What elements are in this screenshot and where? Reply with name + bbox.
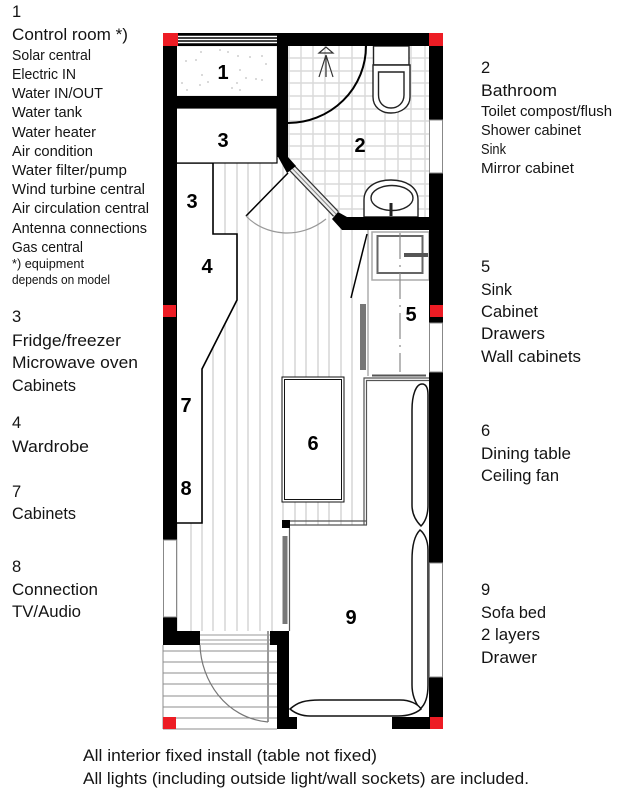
legend 9: sofa bed: 9 xyxy=(481,581,490,599)
icon: bathroom sink xyxy=(364,180,418,217)
legend 1: control room: Water heater xyxy=(12,125,96,141)
legend 4: wardrobe xyxy=(12,414,89,456)
legend 7: cabinets xyxy=(12,483,76,523)
footer note xyxy=(83,747,529,788)
legend 6: dining table: Ceiling fan xyxy=(481,467,559,485)
legend 1: control room: Control room *) xyxy=(12,26,128,44)
legend 6: dining table: Dining table xyxy=(481,445,571,463)
legend 1: control room: Water tank xyxy=(12,105,83,121)
legend 1: control room: Air condition xyxy=(12,144,93,160)
legend 3: kitchen appliances: Fridge/freezer xyxy=(12,332,122,350)
legend 8: connection xyxy=(12,558,98,621)
room 3 upper unit xyxy=(176,108,277,163)
legend 1: control room: depends on model xyxy=(12,273,110,287)
legend 5: sink: 5 xyxy=(481,258,490,276)
room numbers: 5 xyxy=(405,304,417,326)
room numbers: 3 xyxy=(186,191,198,213)
legend 9: sofa bed: Sofa bed xyxy=(481,604,546,622)
legend 5: sink: Wall cabinets xyxy=(481,348,581,366)
legend 1: control room: *) equipment xyxy=(12,257,85,271)
legend 4: wardrobe: 4 xyxy=(12,414,21,432)
legend 3: kitchen appliances: Cabinets xyxy=(12,377,76,395)
legend 7: cabinets: 7 xyxy=(12,483,21,501)
room numbers: 8 xyxy=(180,478,192,500)
cabinet outline: units 3, 4, 7, 8 xyxy=(176,163,237,523)
legend 5: sink xyxy=(481,258,581,366)
room numbers: 9 xyxy=(345,607,357,629)
legend 1: control room: Wind turbine central xyxy=(12,182,145,198)
legend 1: control room: Water IN/OUT xyxy=(12,86,103,102)
top window xyxy=(177,33,277,46)
legend 2: bathroom: Sink xyxy=(481,142,507,158)
shower curve xyxy=(288,46,366,123)
porch xyxy=(163,631,277,729)
legend 2: bathroom: Bathroom xyxy=(481,82,557,100)
bathroom door xyxy=(246,167,336,233)
legend 5: sink: Sink xyxy=(481,281,513,299)
legend 9: sofa bed: Drawer xyxy=(481,649,538,667)
corridor floor planks xyxy=(177,163,352,631)
legend 2: bathroom: Toilet compost/flush xyxy=(481,104,612,120)
room numbers: 6 xyxy=(307,433,319,455)
side windows xyxy=(164,120,442,729)
legend 5: sink: Drawers xyxy=(481,325,545,343)
legend 1: control room: 1 xyxy=(12,3,21,21)
walls xyxy=(163,33,443,729)
legend 1: control room: Electric IN xyxy=(12,67,76,83)
room numbers xyxy=(180,62,417,629)
red corner posts xyxy=(163,33,443,729)
room numbers: 7 xyxy=(180,395,192,417)
legend 6: dining table: 6 xyxy=(481,422,490,440)
floor plan xyxy=(163,33,443,729)
legend 2: bathroom: Mirror cabinet xyxy=(481,161,574,177)
legend 9: sofa bed xyxy=(481,581,546,667)
room 2: bathroom xyxy=(288,46,429,217)
legend 1: control room: Antenna connections xyxy=(12,221,147,237)
legend 6: dining table xyxy=(481,422,571,485)
sofa bed area xyxy=(282,378,429,717)
legend 4: wardrobe: Wardrobe xyxy=(12,438,89,456)
icon: toilet xyxy=(373,46,410,113)
footer note: All interior fixed install (table not fixed) xyxy=(83,747,377,765)
room numbers: 3 xyxy=(217,130,229,152)
room 1: control room xyxy=(176,46,277,96)
kitchen unit 5 xyxy=(351,230,429,378)
legend 3: kitchen appliances xyxy=(12,308,138,395)
legend 8: connection: 8 xyxy=(12,558,21,576)
legend 3: kitchen appliances: Microwave oven xyxy=(12,354,138,372)
legend 8: connection: TV/Audio xyxy=(12,603,81,621)
room numbers: 1 xyxy=(217,62,229,84)
legend 1: control room xyxy=(12,3,149,287)
legend 2: bathroom: 2 xyxy=(481,59,490,77)
room numbers: 4 xyxy=(201,256,213,278)
legend 3: kitchen appliances: 3 xyxy=(12,308,21,326)
footer note: All lights (including outside light/wall sockets) are included. xyxy=(83,770,529,788)
legend 8: connection: Connection xyxy=(12,581,98,599)
legend 1: control room: Gas central xyxy=(12,240,83,256)
legend 5: sink: Cabinet xyxy=(481,303,538,321)
legend 1: control room: Solar central xyxy=(12,48,91,64)
legend 2: bathroom xyxy=(481,59,612,177)
legend 1: control room: Air circulation central xyxy=(12,201,149,217)
legend 7: cabinets: Cabinets xyxy=(12,505,76,523)
legend 1: control room: Water filter/pump xyxy=(12,163,127,179)
legend 9: sofa bed: 2 layers xyxy=(481,626,540,644)
room numbers: 2 xyxy=(354,135,366,157)
icon: shower xyxy=(319,47,333,77)
dining table xyxy=(282,377,344,502)
legend 2: bathroom: Shower cabinet xyxy=(481,123,581,139)
